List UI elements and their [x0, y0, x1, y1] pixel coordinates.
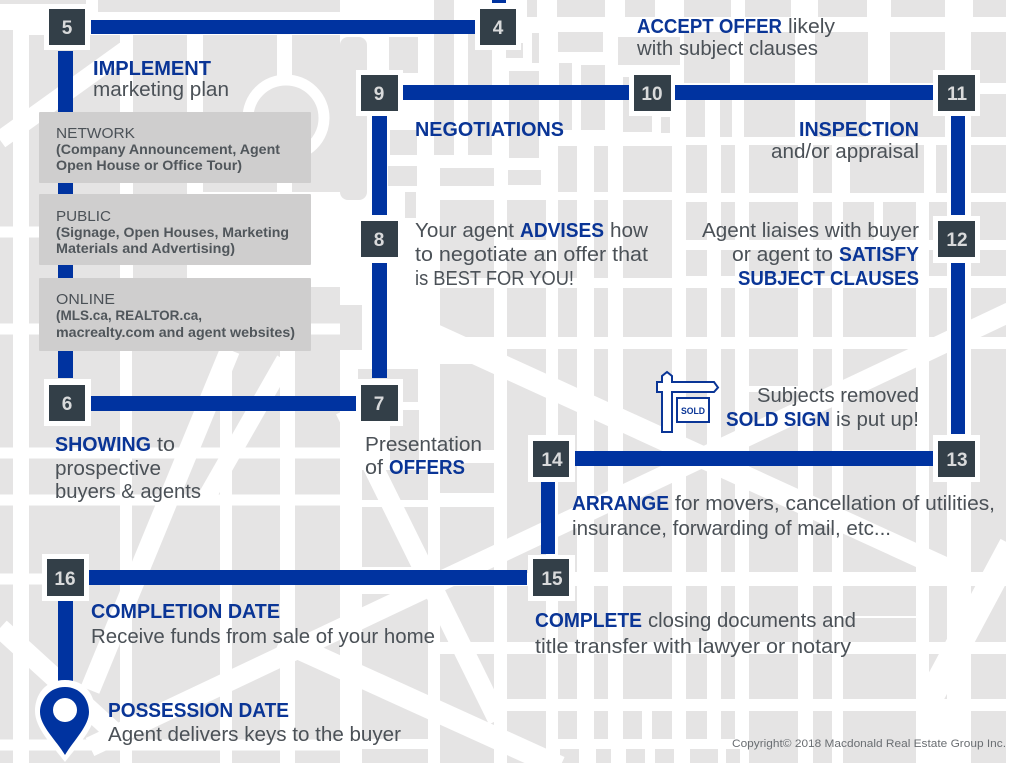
panel: public: (Signage, Open Houses, Marketing: [56, 224, 289, 240]
node 11: [933, 70, 980, 116]
panel: online: (MLS.ca, REALTOR.ca,: [56, 307, 202, 323]
node 5: 5: [62, 18, 73, 39]
text: satisfy subject clauses: or agent to: [732, 244, 833, 266]
node 9: [356, 70, 403, 116]
node 16: [42, 554, 89, 601]
node 15: [528, 555, 575, 601]
node 4: [475, 4, 521, 50]
node 14: 14: [541, 450, 563, 471]
text: presentation of offers: [365, 434, 482, 479]
text: possession date: Agent delivers keys to the buyer: [108, 724, 401, 746]
node 12: 12: [946, 230, 968, 251]
text: agent advises: is BEST FOR YOU!: [415, 268, 574, 290]
text: showing: SHOWING: [55, 434, 151, 456]
text: inspection: [771, 119, 919, 163]
text: satisfy subject clauses: SUBJECT CLAUSES: [738, 268, 919, 290]
node 7: [356, 379, 403, 426]
node 6: 6: [62, 394, 72, 415]
text: arrange: for movers, cancellation of utilities,: [675, 493, 995, 515]
text: implement: IMPLEMENT: [93, 58, 211, 80]
text: inspection: INSPECTION: [799, 119, 919, 141]
node 13: 13: [946, 450, 968, 471]
panel: online: ONLINE: [56, 291, 115, 308]
text: subjects removed: [726, 385, 919, 431]
panel: public: [39, 194, 311, 265]
text: possession date: [108, 700, 401, 746]
node 4: 4: [493, 18, 504, 39]
text: presentation of offers: of: [365, 457, 383, 479]
text: completion date: COMPLETION DATE: [91, 601, 280, 623]
text: implement: [93, 58, 229, 101]
text: agent advises: Your agent: [415, 220, 514, 242]
text: completion date: Receive funds from sale of your home: [91, 626, 435, 648]
panel: network: [39, 112, 311, 183]
panel: public: Materials and Advertising): [56, 240, 235, 256]
text: showing: [55, 434, 201, 503]
text: negotiations: NEGOTIATIONS: [415, 119, 564, 141]
text: accept offer: [636, 16, 835, 60]
node 12: [933, 216, 980, 263]
panel: network: NETWORK: [56, 125, 135, 142]
text: subjects removed: SOLD SIGN: [726, 409, 830, 431]
text: showing: buyers & agents: [55, 481, 201, 503]
text: agent advises: how: [610, 220, 649, 242]
text: satisfy subject clauses: [702, 220, 920, 290]
text: arrange: [572, 493, 995, 540]
node 7: 7: [374, 394, 384, 415]
route line: [58, 0, 965, 681]
text: satisfy subject clauses: SATISFY: [839, 244, 920, 266]
node 8: [356, 216, 403, 263]
text: agent advises: ADVISES: [520, 220, 604, 242]
text: possession date: POSSESSION DATE: [108, 700, 289, 722]
text: complete: [535, 610, 856, 658]
node 10: 10: [641, 84, 663, 105]
text: complete: COMPLETE: [535, 610, 642, 632]
text: inspection: and/or appraisal: [771, 141, 919, 163]
text: arrange: insurance, forwarding of mail, etc...: [572, 518, 891, 540]
text: arrange: ARRANGE: [572, 493, 669, 515]
panel: online: [39, 278, 311, 351]
node 13: [933, 435, 980, 482]
text: presentation of offers: OFFERS: [389, 457, 465, 479]
node 5: [44, 4, 90, 50]
panel: network: Open House or Office Tour): [56, 157, 242, 173]
panel: online: macrealty.com and agent websites): [56, 324, 295, 340]
icon: sold sign: [657, 372, 718, 432]
node 10: [629, 70, 675, 116]
text: agent advises: to negotiate an offer that: [415, 244, 648, 266]
text: accept offer: with subject clauses: [636, 38, 818, 60]
text: completion date: [91, 601, 435, 648]
text: showing: prospective: [55, 458, 161, 480]
text: presentation of offers: Presentation: [365, 434, 482, 456]
text: subjects removed: is put up!: [836, 409, 919, 431]
text: accept offer: ACCEPT OFFER: [637, 16, 783, 38]
node 16: 16: [54, 569, 76, 590]
node 8: 8: [374, 230, 384, 251]
text: implement: marketing plan: [93, 79, 229, 101]
node 15: 15: [541, 569, 563, 590]
node 9: 9: [374, 84, 384, 105]
node 6: [44, 379, 91, 426]
text: satisfy subject clauses: Agent liaises with buyer: [702, 220, 919, 242]
text: subjects removed: Subjects removed: [757, 385, 919, 407]
panel: network: (Company Announcement, Agent: [56, 141, 280, 157]
copyright: Copyright© 2018 Macdonald Real Estate Group Inc.: [732, 738, 1006, 750]
icon: sold sign: SOLD: [681, 406, 705, 416]
text: complete: closing documents and: [648, 610, 856, 632]
text: complete: title transfer with lawyer or notary: [535, 636, 851, 658]
text: accept offer: likely: [788, 16, 835, 38]
node 11: 11: [947, 84, 967, 105]
panel: public: PUBLIC: [56, 208, 111, 225]
text: showing: to: [157, 434, 175, 456]
text: agent advises: [415, 220, 649, 290]
node 14: [528, 435, 575, 482]
icon: location pin: [35, 680, 95, 762]
